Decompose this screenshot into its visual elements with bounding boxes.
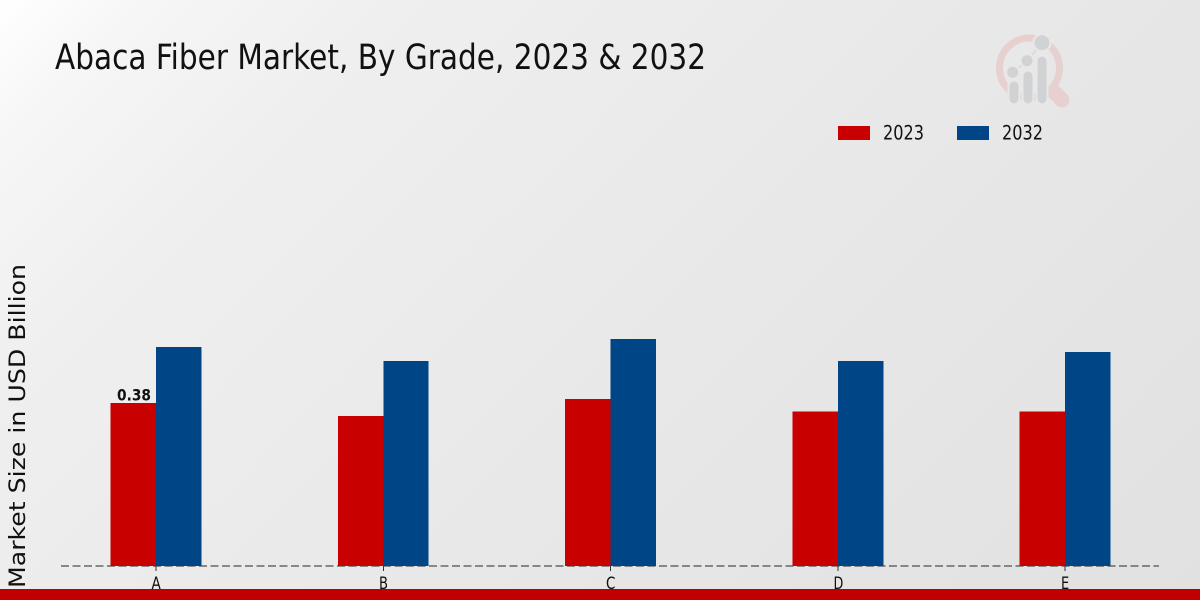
- ticks: [156, 566, 1065, 571]
- group D bars: [792, 361, 884, 566]
- y axis label: Market Size in USD Billion: [5, 264, 31, 588]
- baseline: [61, 565, 1159, 567]
- group C bars: [565, 339, 656, 566]
- category labels: [152, 574, 1069, 593]
- data label: 0.38: [117, 386, 151, 404]
- legend: 2032: [1002, 122, 1043, 144]
- group A bars: [110, 347, 202, 566]
- legend: [838, 122, 1043, 144]
- group E bars: [1020, 352, 1110, 566]
- category labels: C: [606, 574, 615, 593]
- bar chart: [61, 339, 1159, 593]
- category labels: E: [1061, 574, 1069, 593]
- watermark logo: [1000, 34, 1062, 105]
- legend: 2023: [883, 122, 924, 144]
- category labels: D: [834, 574, 843, 593]
- category labels: B: [379, 574, 388, 593]
- title: Abaca Fiber Market, By Grade, 2023 & 2032: [55, 38, 706, 78]
- group B bars: [338, 361, 428, 566]
- bottom band: [0, 589, 1200, 600]
- category labels: A: [152, 574, 161, 593]
